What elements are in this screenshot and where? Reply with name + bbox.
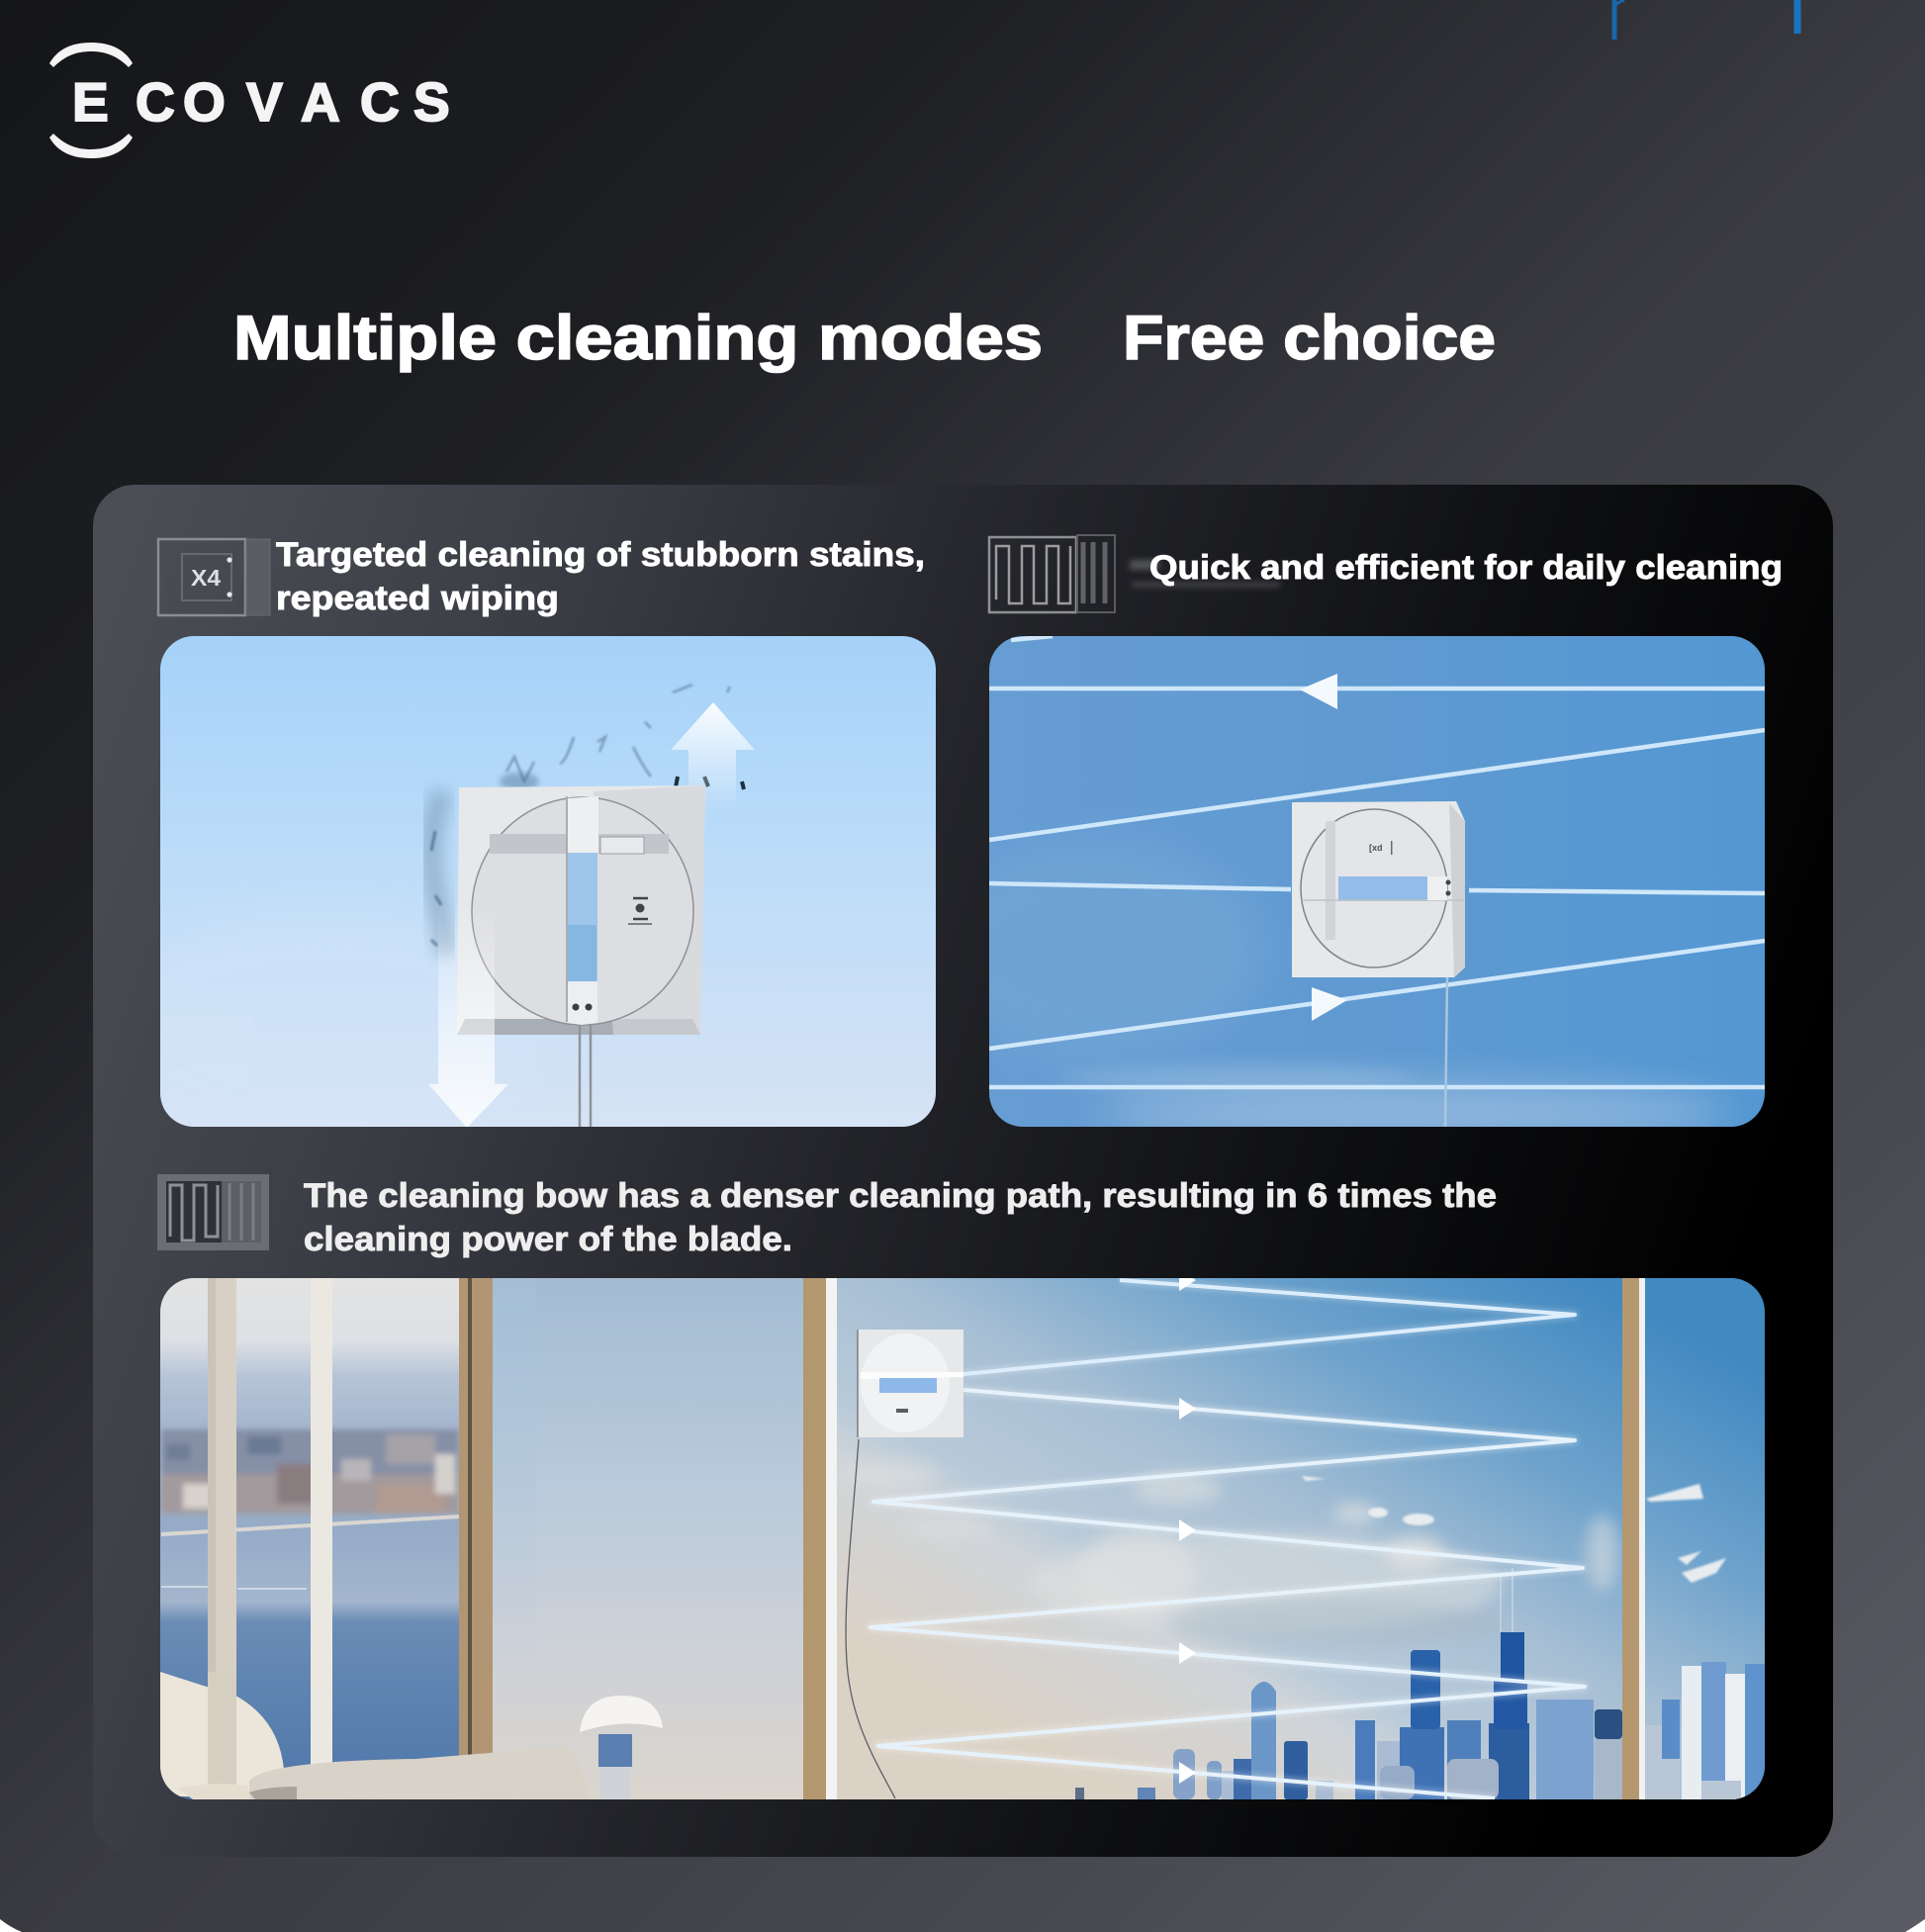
cable bbox=[1445, 977, 1447, 1128]
text: mode 1 heading: repeated wiping bbox=[276, 580, 559, 617]
arrow: down bbox=[428, 904, 508, 1128]
robot: side view: [xd bbox=[1369, 843, 1383, 853]
logo: ECOVACS bbox=[49, 43, 450, 158]
window view: water and far city bbox=[160, 1278, 459, 1799]
card: targeted cleaning photo bbox=[160, 636, 936, 1127]
title: Multiple cleaning modes bbox=[233, 304, 1043, 373]
right window frame bbox=[1622, 1278, 1645, 1799]
panel: cleaning modes bbox=[93, 485, 1833, 1857]
robot: front view bbox=[457, 785, 705, 1035]
icon: fast path mode bbox=[989, 535, 1115, 612]
text: mode 3 heading: cleaning power of the blade. bbox=[304, 1221, 792, 1258]
cleaning path zigzag bbox=[871, 1280, 1585, 1798]
title bbox=[233, 304, 1496, 373]
card: daily cleaning photo bbox=[930, 636, 1765, 1141]
icon: dense path mode bbox=[157, 1174, 269, 1250]
cleaning path lines bbox=[989, 636, 1765, 1087]
cable bbox=[846, 1439, 895, 1798]
icon: x4 mode bbox=[158, 539, 270, 615]
arrow: left bbox=[1300, 674, 1337, 709]
dirt smears bbox=[431, 685, 744, 955]
sofa bbox=[160, 1672, 589, 1799]
clouds bbox=[869, 1463, 1622, 1634]
text: mode 3 heading: The cleaning bow has a denser cleaning path, resulting in 6 times the bbox=[304, 1177, 1497, 1215]
window posts and frames bbox=[208, 1278, 837, 1799]
arrow: right bbox=[1312, 987, 1347, 1021]
skyline bbox=[1075, 1568, 1765, 1799]
title: Free choice bbox=[1123, 304, 1496, 373]
robot: side view bbox=[1292, 801, 1465, 977]
logo: ECOVACS: ECOVACS bbox=[72, 71, 450, 133]
ghost text artefact bbox=[1130, 560, 1280, 588]
text: mode 1 heading bbox=[276, 536, 925, 617]
blue marks at top edge bbox=[1614, 0, 1801, 129]
arrow: up bbox=[671, 702, 755, 797]
cable bbox=[580, 1025, 591, 1127]
text: mode 2 heading: Quick and efficient for daily cleaning bbox=[1149, 549, 1783, 587]
icon: x4 mode: X4 bbox=[191, 565, 221, 591]
card: room with window photo bbox=[160, 1269, 1765, 1799]
lamp bbox=[580, 1696, 663, 1799]
robot: on window bbox=[858, 1330, 963, 1437]
arrows on path bbox=[1179, 1269, 1196, 1784]
text: mode 3 heading bbox=[304, 1177, 1497, 1258]
text: mode 1 heading: Targeted cleaning of stubborn stains, bbox=[276, 536, 925, 574]
